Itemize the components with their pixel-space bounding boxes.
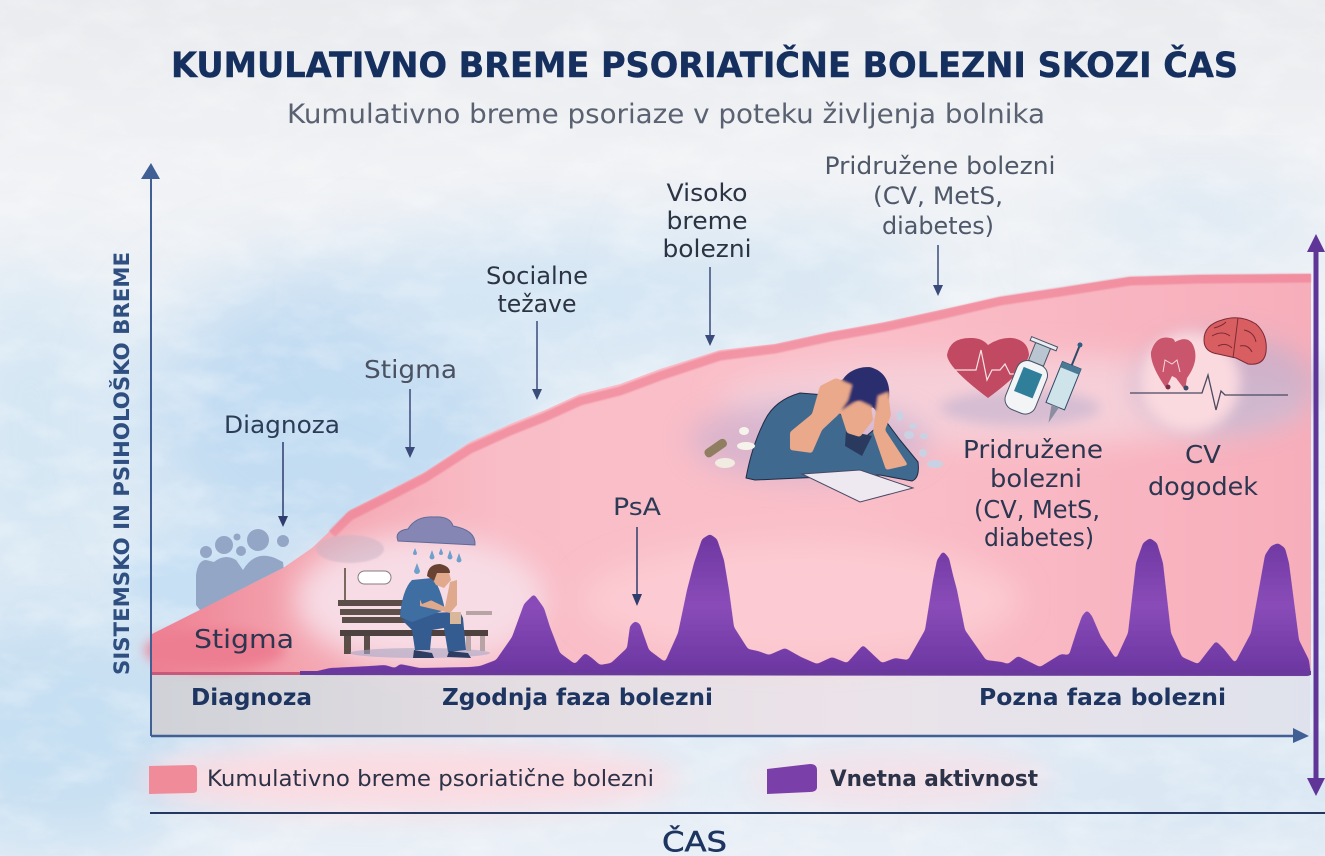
annotation: Diagnoza bbox=[224, 411, 340, 527]
phase band bbox=[152, 675, 1310, 735]
subtitle: Kumulativno breme psoriaze v poteku življenja bolnika bbox=[287, 99, 1045, 130]
phase: Zgodnja faza bolezni: Zgodnja faza bolezni bbox=[442, 685, 713, 711]
y axis label: SISTEMSKO IN PSIHOLOŠKO BREME bbox=[109, 252, 134, 675]
icon: syringe bbox=[1039, 339, 1090, 427]
label: Pridružene bolezni in area: Pridružene bbox=[963, 435, 1103, 464]
annotation: Stigma bbox=[364, 355, 457, 458]
legend: cumulative burden: Kumulativno breme psoriatične bolezni bbox=[207, 767, 654, 792]
chart: inflammatory activity bbox=[300, 534, 1311, 676]
annotation: Socialne težave: težave bbox=[498, 290, 576, 318]
label: Pridružene bolezni in area: (CV, MetS, bbox=[974, 495, 1100, 524]
time rule bbox=[150, 812, 1325, 814]
icon: heart with ECG bbox=[947, 338, 1029, 398]
icon: ECG line bbox=[1130, 375, 1288, 410]
label: Pridružene bolezni in area bbox=[963, 435, 1103, 552]
shadow under comorbidity icons bbox=[940, 390, 1100, 426]
annotation: PsA bbox=[613, 493, 662, 606]
icon: distressed man with pills bbox=[690, 367, 943, 502]
icon: man on bench under a rain cloud bbox=[316, 517, 492, 658]
annotation: Pridružene bolezni top: (CV, MetS, bbox=[873, 182, 1003, 210]
annotation: Visoko breme bolezni: bolezni bbox=[662, 235, 752, 263]
label: CV dogodek: CV bbox=[1185, 440, 1221, 469]
axis: horizontal bbox=[151, 728, 1309, 743]
annotation: Visoko breme bolezni: breme bbox=[666, 207, 748, 235]
icon: heart organ with glow bbox=[1140, 332, 1240, 432]
chart baseline bbox=[152, 671, 1311, 675]
annotation: Pridružene bolezni top: diabetes) bbox=[882, 212, 994, 240]
icon: brain bbox=[1204, 318, 1266, 364]
annotation: Visoko breme bolezni bbox=[662, 179, 752, 346]
icon: medicine vial bbox=[1002, 336, 1059, 417]
legend glow bbox=[140, 745, 680, 813]
axis: vertical bbox=[141, 163, 160, 736]
icon: crowd silhouette bbox=[196, 529, 289, 610]
annotation: Diagnoza: Diagnoza bbox=[224, 411, 340, 439]
legend: inflammatory activity: Vnetna aktivnost bbox=[830, 767, 1038, 792]
axis: right double arrow bbox=[1307, 234, 1325, 796]
legend glow purple bbox=[750, 749, 1050, 809]
title: KUMULATIVNO BREME PSORIATIČNE BOLEZNI SKOZI ČAS bbox=[171, 44, 1238, 86]
label: Pridružene bolezni in area: bolezni bbox=[990, 464, 1082, 493]
label: Pridružene bolezni in area: diabetes) bbox=[984, 523, 1094, 552]
annotation: Pridružene bolezni top bbox=[824, 152, 1056, 296]
label: Stigma in area: Stigma bbox=[194, 625, 294, 655]
annotation: Pridružene bolezni top: Pridružene bolezni bbox=[824, 152, 1056, 180]
legend: inflammatory activity bbox=[767, 764, 1038, 794]
label: CV dogodek: dogodek bbox=[1148, 472, 1259, 501]
phase: Diagnoza: Diagnoza bbox=[191, 685, 312, 711]
annotation: Socialne težave: Socialne bbox=[486, 262, 588, 290]
annotation: Stigma: Stigma bbox=[364, 355, 457, 384]
annotation: Visoko breme bolezni: Visoko bbox=[666, 179, 748, 207]
annotation: Socialne težave bbox=[486, 262, 588, 400]
icon: rain cloud bbox=[397, 517, 475, 574]
annotation: PsA: PsA bbox=[613, 493, 662, 521]
mottled shading behind heart and brain bbox=[1135, 335, 1315, 435]
phase: Pozna faza bolezni: Pozna faza bolezni bbox=[979, 685, 1226, 711]
chart: cumulative burden area bbox=[145, 274, 1311, 674]
label: CV dogodek bbox=[1148, 440, 1259, 501]
